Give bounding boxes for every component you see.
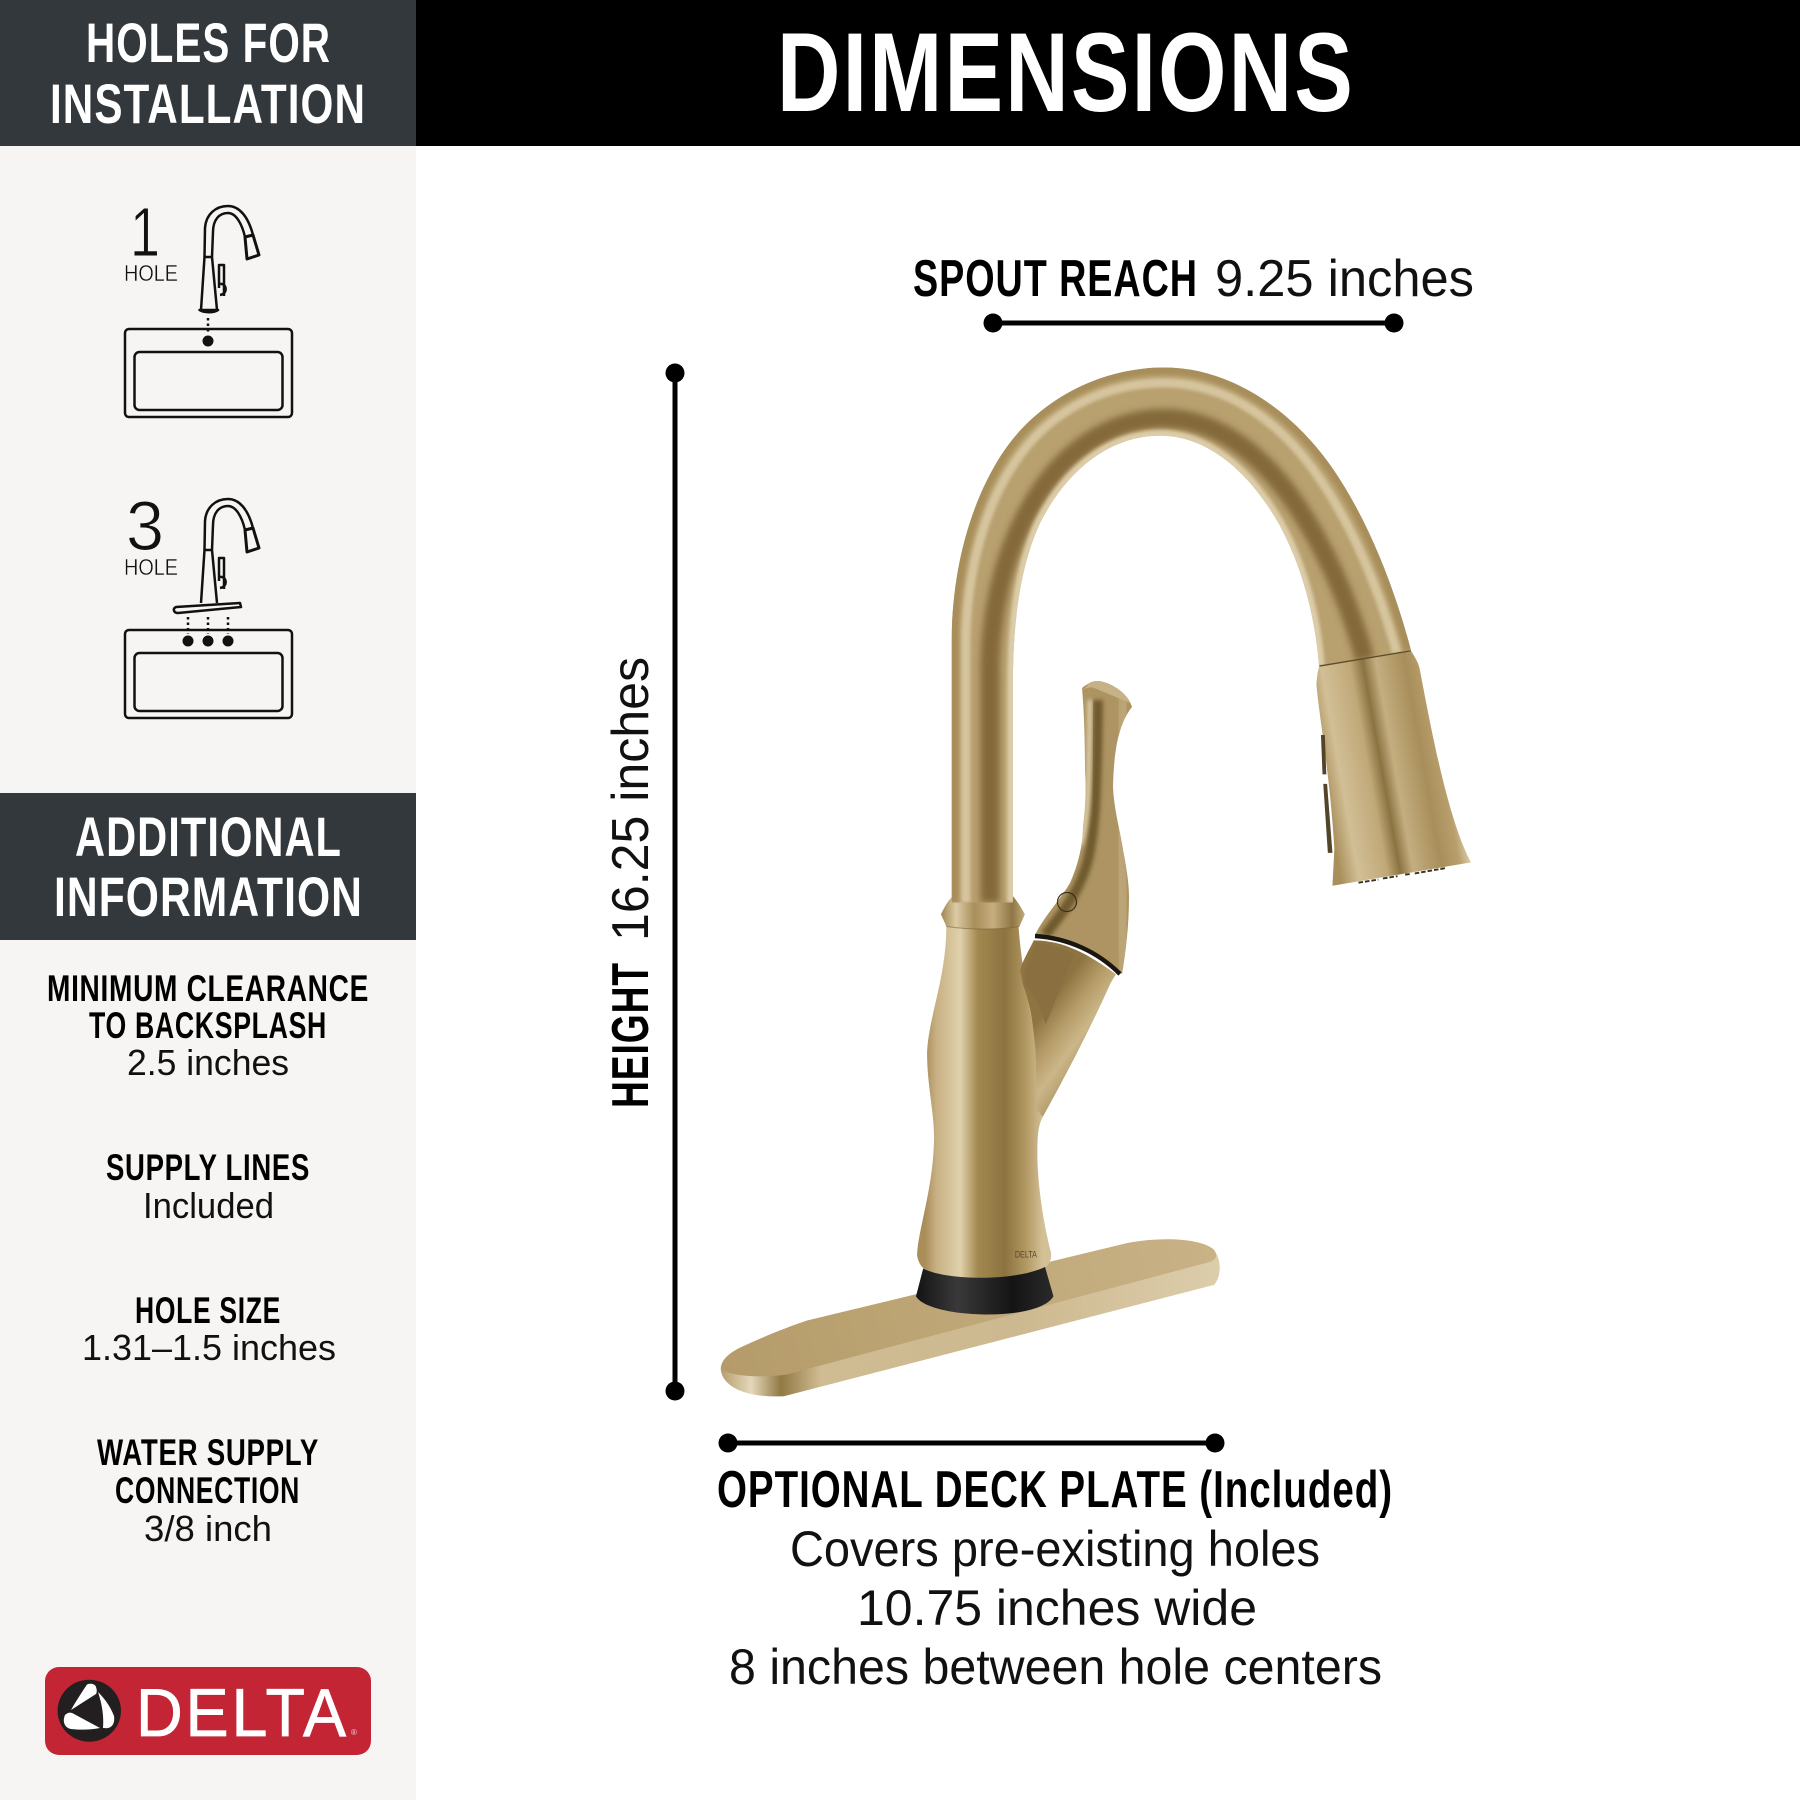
label: spout reach: SPOUT REACH bbox=[913, 250, 1198, 308]
arrow: height dimension line bbox=[666, 364, 684, 1400]
text block: hole size: 1.31–1.5 inches bbox=[82, 1327, 336, 1368]
icon: one hole installation: 1 bbox=[130, 193, 160, 271]
label: height: 16.25 inches bbox=[602, 657, 660, 941]
logo: Delta bbox=[45, 1667, 371, 1755]
icon: one hole installation: HOLE bbox=[124, 260, 178, 286]
icon: three hole installation: 3 bbox=[126, 487, 164, 565]
text block: optional deck plate: OPTIONAL DECK PLATE (Included) bbox=[717, 1461, 1393, 1519]
text block: optional deck plate: 10.75 inches wide bbox=[857, 1580, 1257, 1636]
text block: water supply connection: CONNECTION bbox=[115, 1470, 300, 1511]
black base ring bbox=[916, 1265, 1053, 1314]
text block: hole size bbox=[82, 1290, 336, 1368]
text block: supply lines bbox=[106, 1147, 310, 1226]
text block: water supply connection bbox=[97, 1432, 319, 1549]
text block: minimum clearance: TO BACKSPLASH bbox=[89, 1005, 327, 1046]
text block: supply lines: Included bbox=[143, 1185, 274, 1226]
text block: optional deck plate bbox=[717, 1461, 1393, 1695]
faucet photo bbox=[721, 359, 1471, 1396]
text block: water supply connection: 3/8 inch bbox=[144, 1508, 272, 1549]
text block: optional deck plate: 8 inches between hole centers bbox=[729, 1639, 1382, 1695]
panel heading: additional information: ADDITIONAL bbox=[75, 805, 342, 868]
panel heading: additional information bbox=[0, 793, 416, 940]
icon: one hole installation bbox=[124, 193, 292, 417]
text block: minimum clearance: MINIMUM CLEARANCE bbox=[47, 968, 369, 1009]
arrow: deck plate dimension line bbox=[718, 1434, 1224, 1452]
label: spout reach: 9.25 inches bbox=[1215, 250, 1474, 308]
panel heading: additional information: INFORMATION bbox=[54, 865, 363, 928]
title bar bbox=[416, 0, 1800, 146]
handle tube bbox=[1020, 940, 1116, 1117]
text block: minimum clearance: 2.5 inches bbox=[127, 1042, 289, 1083]
text block: water supply connection: WATER SUPPLY bbox=[97, 1432, 319, 1473]
panel heading: holes for installation bbox=[0, 0, 416, 146]
label: height: HEIGHT bbox=[602, 962, 660, 1108]
logo: Delta: DELTA bbox=[136, 1675, 349, 1751]
spray head bbox=[1316, 651, 1471, 886]
faucet body and collar bbox=[917, 896, 1051, 1278]
label: height bbox=[602, 657, 660, 1108]
icon: three hole installation: HOLE bbox=[124, 554, 178, 580]
text block: supply lines: SUPPLY LINES bbox=[106, 1147, 310, 1188]
logo: Delta: ® bbox=[351, 1728, 357, 1737]
text block: hole size: HOLE SIZE bbox=[135, 1290, 281, 1331]
text block: optional deck plate: Covers pre-existing holes bbox=[790, 1521, 1320, 1577]
lever handle bbox=[1034, 681, 1132, 976]
arrow: spout reach dimension line bbox=[984, 314, 1404, 332]
panel heading: holes for installation: INSTALLATION bbox=[50, 72, 366, 135]
deck plate bbox=[721, 1239, 1220, 1396]
title: DIMENSIONS bbox=[777, 10, 1355, 135]
icon: three hole installation bbox=[124, 487, 292, 718]
text block: minimum clearance bbox=[47, 968, 369, 1083]
spout arc bbox=[952, 368, 1411, 902]
panel: left sidebar bbox=[0, 0, 416, 1800]
panel heading: holes for installation: HOLES FOR bbox=[86, 11, 331, 74]
faucet body and collar: DELTA bbox=[1015, 1249, 1038, 1259]
